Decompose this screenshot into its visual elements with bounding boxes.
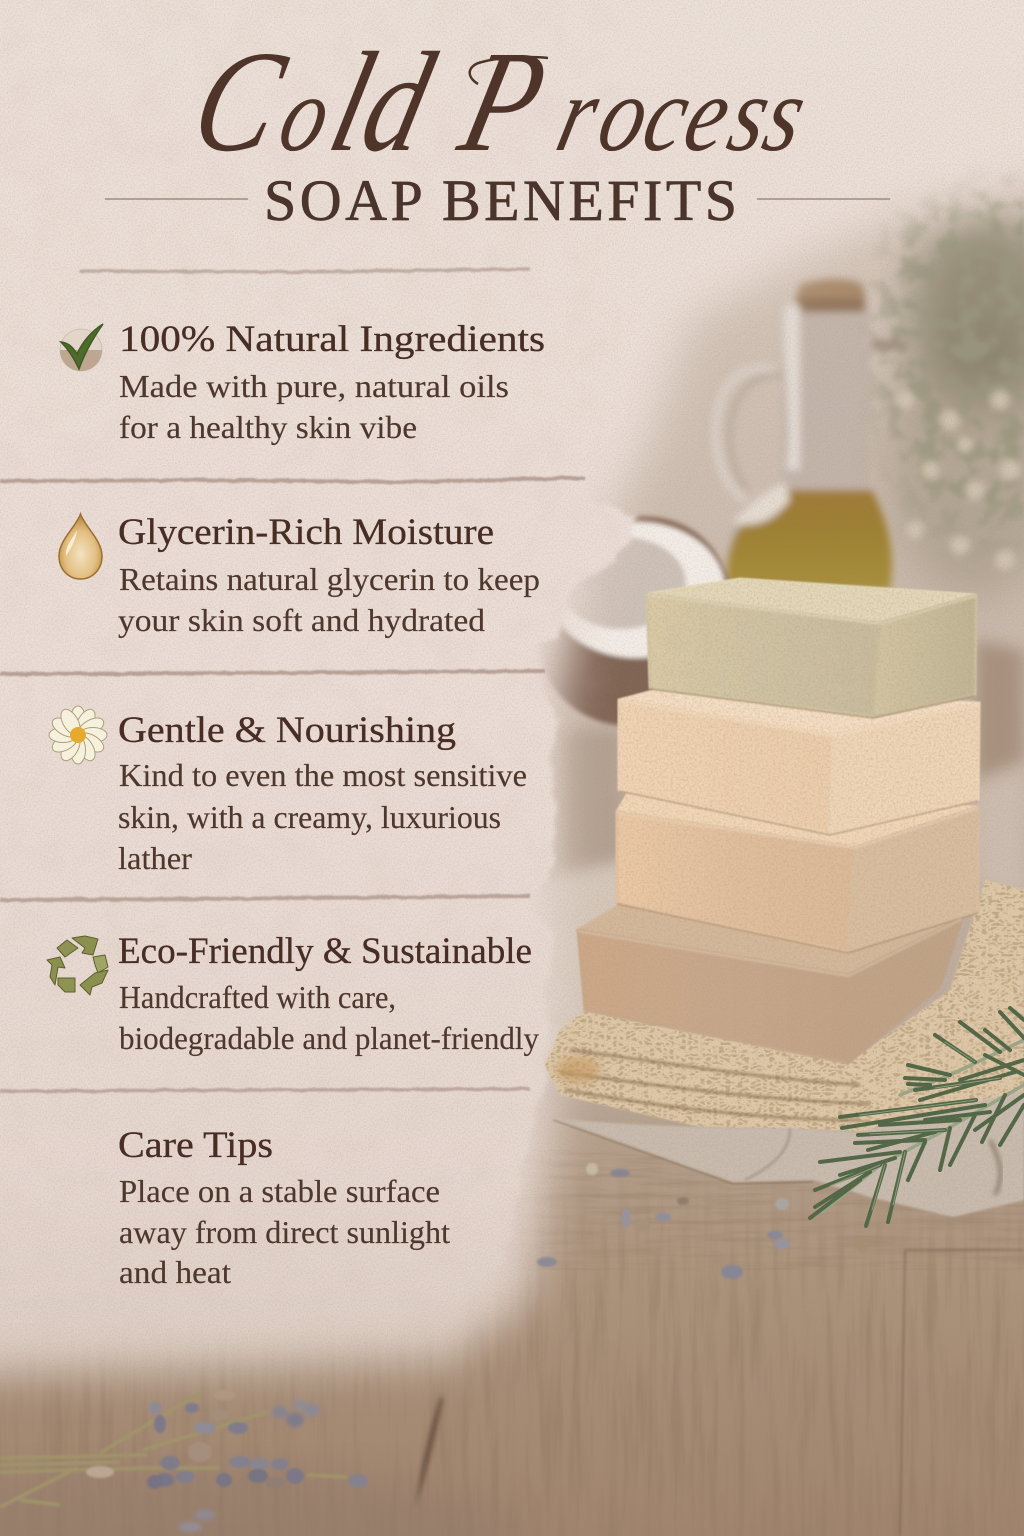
- description: Retains natural glycerin to keep: [119, 562, 540, 597]
- heading: 100% Natural Ingredients: [119, 319, 545, 360]
- title: o: [588, 53, 662, 174]
- title: c: [633, 53, 702, 174]
- heading: Gentle & Nourishing: [118, 710, 456, 751]
- title: P: [446, 22, 560, 182]
- dried lavender bundle: [0, 1390, 368, 1532]
- title: l: [317, 22, 389, 181]
- soap stack: [570, 575, 985, 1070]
- icon: recycling arrows: [47, 936, 108, 995]
- care tips: [118, 1125, 450, 1290]
- title: r: [547, 53, 612, 174]
- description: Made with pure, natural oils: [119, 369, 509, 404]
- olive oil bottle: [716, 279, 905, 590]
- title: d: [349, 22, 448, 181]
- torn paper dividers: [0, 269, 585, 1091]
- description: your skin soft and hydrated: [118, 603, 485, 638]
- soap bar 4 (bottom): [578, 905, 962, 1063]
- benefit: glycerin moisture: [59, 512, 540, 638]
- description: biodegradable and planet-friendly: [119, 1021, 539, 1056]
- description: skin, with a creamy, luxurious: [118, 800, 501, 835]
- description: Kind to even the most sensitive: [119, 758, 527, 793]
- icon: oil drop: [59, 514, 102, 579]
- linen cloth behind stack: [520, 640, 1024, 1080]
- benefit: gentle and nourishing: [49, 706, 527, 876]
- subtitle: SOAP BENEFITS: [264, 168, 737, 233]
- soap bar 2: [619, 690, 979, 834]
- description: for a healthy skin vibe: [119, 410, 417, 445]
- benefit: natural ingredients: [60, 319, 545, 445]
- title: C: [179, 22, 300, 182]
- rosemary sprig: [810, 1008, 1024, 1226]
- foliage, blurred: [869, 177, 1024, 608]
- description: Place on a stable surface: [119, 1174, 440, 1209]
- benefit: eco-friendly: [47, 931, 539, 1056]
- heading: Eco-Friendly & Sustainable: [118, 931, 532, 972]
- description: Handcrafted with care,: [119, 980, 396, 1015]
- linen cloth under loofah: [545, 1085, 1024, 1225]
- description: [118, 562, 540, 638]
- coconut half: [538, 516, 730, 726]
- title: e: [674, 53, 743, 174]
- description: [119, 369, 509, 445]
- wooden table: [0, 1090, 1024, 1536]
- description: lather: [118, 841, 193, 876]
- title: o: [269, 53, 343, 174]
- heading: Glycerin-Rich Moisture: [118, 512, 494, 553]
- description: [119, 980, 539, 1056]
- loofah pad: [540, 875, 1024, 1137]
- lavender on table: [537, 1163, 868, 1288]
- title: s: [718, 53, 783, 174]
- heading: Care Tips: [118, 1125, 273, 1166]
- description: [119, 1174, 450, 1290]
- icon: daisy: [49, 706, 107, 764]
- title: [179, 22, 826, 182]
- soap bar 1 (top): [647, 579, 976, 717]
- soap bar 3: [617, 790, 978, 952]
- title: s: [753, 53, 818, 174]
- icon: check mark: [60, 324, 103, 371]
- description: and heat: [119, 1255, 231, 1290]
- description: [118, 758, 527, 876]
- description: away from direct sunlight: [119, 1215, 450, 1250]
